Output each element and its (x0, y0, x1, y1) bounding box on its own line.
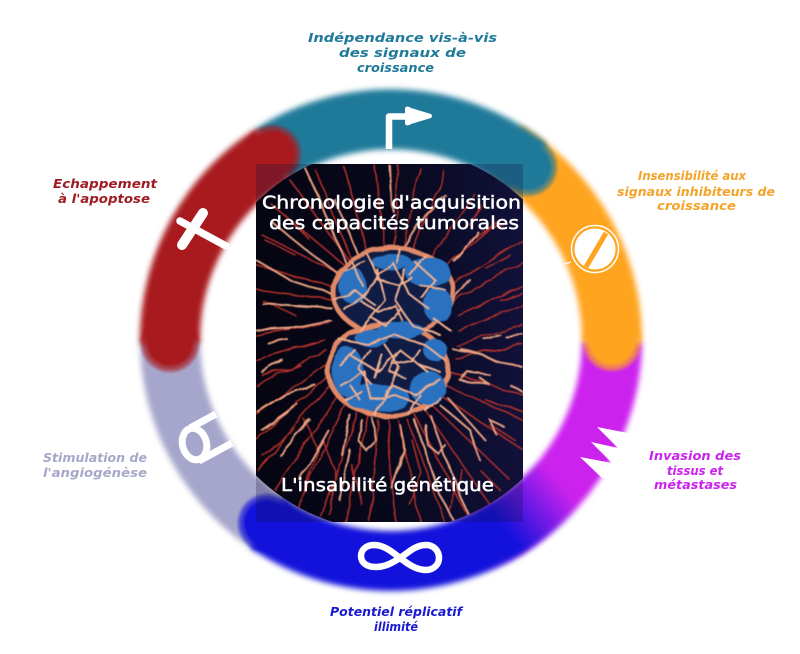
segment: magenta invasion (440, 342, 612, 555)
label: insensitivity to inhibitors (617, 169, 775, 213)
title: chronology heading: des capacités tumorales (269, 213, 519, 234)
photo: cancer cell with filaments (256, 164, 523, 522)
label: invasion and metastases: métastases (654, 478, 737, 492)
label: unlimited replicative potential: Potentiel réplicatif (330, 605, 464, 619)
label: angiogenesis stimulation (43, 451, 147, 480)
icon: invasion zigzag cut (580, 427, 650, 482)
label: insensitivity to inhibitors: Insensibilité aux (638, 169, 747, 183)
label: unlimited replicative potential (330, 605, 464, 634)
cap: red over lavender (139, 312, 201, 374)
label: apoptosis escape: Echappement (53, 177, 158, 191)
label: growth signal independence: croissance (357, 61, 434, 75)
label: growth signal independence (308, 31, 497, 75)
title: chronology heading: Chronologie d'acquisition (262, 192, 521, 214)
label: invasion and metastases: tissus et (667, 464, 724, 478)
label: apoptosis escape: à l'apoptose (58, 192, 150, 206)
icon: infinity symbol (361, 545, 439, 570)
label: growth signal independence: Indépendance vis-à-vis (308, 31, 497, 45)
photo panel: dark tint over the ring (256, 164, 523, 522)
label: insensitivity to inhibitors: signaux inhibiteurs de (617, 185, 775, 199)
label: insensitivity to inhibitors: croissance (657, 199, 736, 213)
cap: blue over lavender (236, 492, 298, 554)
ring: six coloured capability segments (139, 119, 643, 561)
icon: prohibition sign (564, 226, 618, 272)
segment: orange insensitivity (505, 151, 612, 342)
cap: red over teal (241, 123, 303, 185)
cell: blue patches (332, 254, 452, 412)
icon: growth arrow (389, 106, 432, 149)
icon: apoptosis cross (180, 213, 226, 246)
label: apoptosis escape (53, 177, 158, 206)
label: angiogenesis stimulation: l'angiogénèse (43, 466, 147, 480)
filaments: red rays (256, 165, 523, 522)
filaments: pale rays (256, 166, 523, 522)
segment: blue replicative potential (267, 462, 575, 561)
icon: angiogenesis vessel loop (179, 414, 232, 463)
cell: blue dividing body (328, 248, 453, 416)
cell: surface network (335, 250, 450, 415)
caption: genetic instability: L'insabilité génétique (281, 475, 494, 496)
label: invasion and metastases: Invasion des (649, 449, 741, 463)
segment: lavender angiogenesis (170, 340, 272, 526)
label: growth signal independence: des signaux de (339, 46, 466, 60)
label: angiogenesis stimulation: Stimulation de (43, 451, 147, 465)
title: chronology heading (262, 192, 521, 234)
label: invasion and metastases (649, 449, 741, 492)
cap: teal over orange (497, 136, 559, 198)
cap: orange over magenta (581, 311, 643, 373)
label: unlimited replicative potential: illimité (374, 620, 418, 634)
segment: teal growth signals (272, 119, 528, 167)
segment: red apoptosis (170, 154, 272, 343)
